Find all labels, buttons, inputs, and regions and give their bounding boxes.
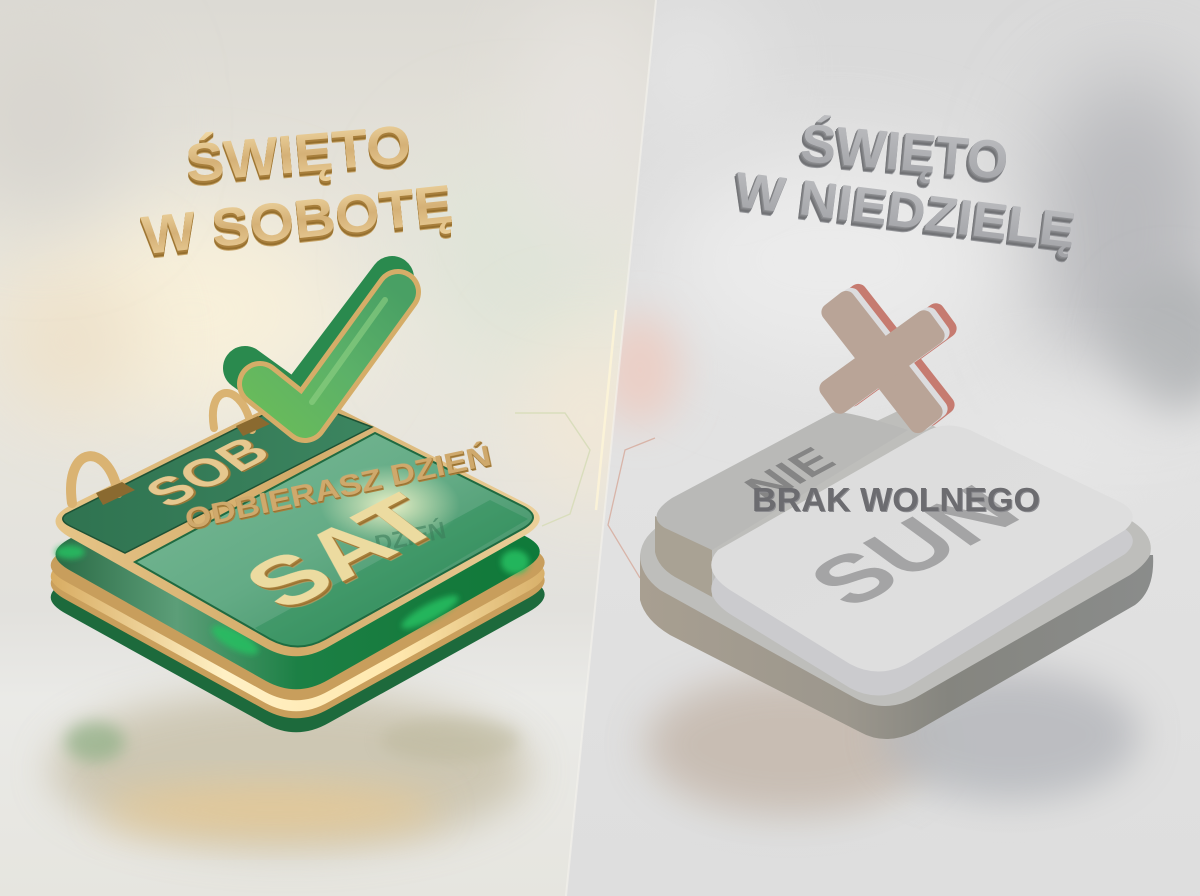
shadow below stone slab [645, 670, 1140, 815]
engraved NIE: NIE [734, 440, 846, 508]
title: left: ŚWIĘTO [183, 114, 414, 194]
ring right [213, 393, 270, 436]
stone platform [640, 410, 1153, 739]
base top [640, 410, 1151, 706]
title: right: ŚWIĘTO [798, 113, 1011, 191]
concrete block side [655, 516, 712, 597]
main panel [135, 433, 533, 646]
glowing gold ring layer [51, 442, 545, 718]
hexagon outline right [608, 438, 655, 578]
calendar icon: green glass and gold [51, 393, 545, 732]
green glass body [56, 431, 540, 689]
background: left warm panel [0, 0, 700, 896]
cross mark [816, 280, 960, 437]
cross middle white [821, 284, 953, 434]
engraved SUN: SUN [789, 472, 1040, 621]
divider line [566, 0, 656, 896]
glass slab top [711, 425, 1133, 672]
main panel lower glow [255, 500, 528, 646]
concrete block top [656, 412, 908, 550]
green body reflections [55, 545, 529, 660]
title: right [732, 113, 1078, 259]
title: left [139, 114, 455, 266]
glass slab side [711, 449, 1133, 696]
header panel [63, 403, 372, 553]
bottom green layer [51, 474, 545, 732]
base side [640, 555, 1153, 739]
title: left: W SOBOTĘ [139, 174, 455, 266]
label SOB: SOB [133, 428, 282, 515]
overlay text: odbierasz dzień: ODBIERASZ DZIEŃ [182, 438, 494, 536]
cross back red [828, 280, 960, 430]
overlay text: brak wolnego: BRAK WOLNEGO [752, 481, 1040, 518]
check mark [245, 278, 398, 420]
shadow below calendar with reflected light [50, 690, 530, 850]
ring left [71, 456, 135, 505]
reflected text DZIEŃ: DZIEŃ [372, 516, 448, 558]
title: right: W NIEDZIELĘ [732, 161, 1078, 259]
hexagon outline left [515, 413, 590, 526]
gold top rim [56, 398, 540, 656]
background: right grey panel [616, 34, 1200, 830]
label SAT: SAT [223, 481, 462, 623]
cross front [816, 287, 948, 437]
main panel sparkle [320, 465, 460, 545]
